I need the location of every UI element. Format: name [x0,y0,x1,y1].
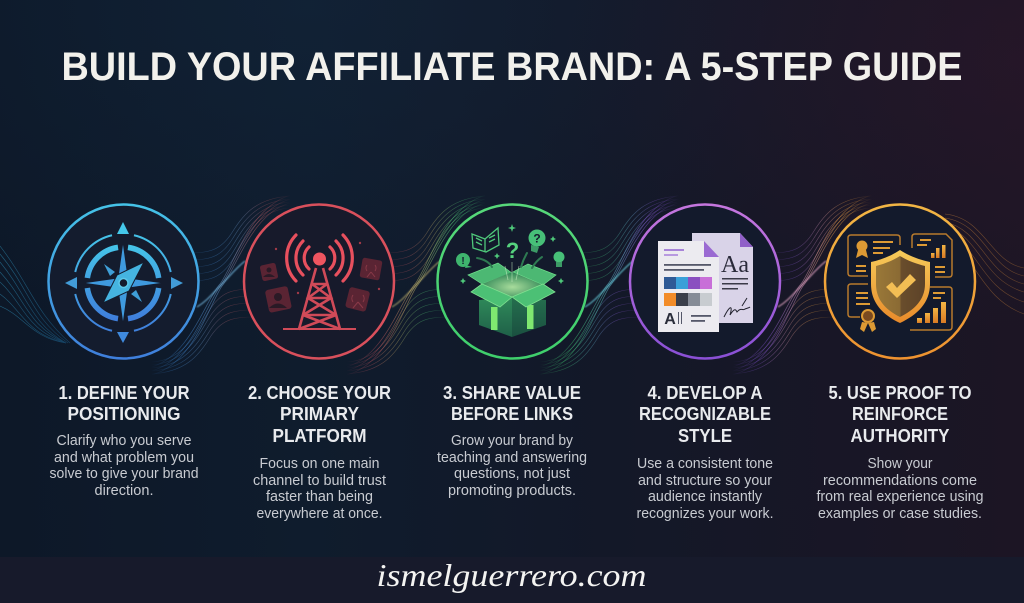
text: step 1 description: and what problem you [54,450,194,466]
title: BUILD YOUR AFFILIATE BRAND: A 5-STEP GUIDE [62,45,962,89]
footer website: ismelguerrero.com [376,557,646,593]
text: step 1 description [50,433,198,499]
text: step 2 description: everywhere at once. [256,506,382,522]
text: step 3 description [437,433,587,499]
text: step 2 description: channel to build trust [253,473,386,489]
heading: step 5: AUTHORITY [850,426,950,446]
text: step 1 description: Clarify who you serve [56,433,192,449]
icon: brand style documents: Aa [721,252,749,278]
heading: step 2: PLATFORM [272,426,366,446]
heading: step 3: 3. SHARE VALUE [443,383,581,403]
icon: brand style documents [630,204,780,358]
heading: step 4 [639,383,771,446]
icon: open gift box: ! [461,256,465,267]
text: step 4 description: recognizes your work. [636,506,774,522]
text: step 3 description: teaching and answering [437,450,587,466]
text: step 4 description: and structure so your [638,473,772,489]
heading: step 1: 1. DEFINE YOUR [58,383,190,403]
flowing wave ribbons connecting the steps [0,195,1024,375]
text: step 3 description: Grow your brand by [451,433,574,449]
icon: open gift box [438,204,588,358]
text: step 4 description: Use a consistent tone [637,456,773,472]
icon: open gift box: ? [506,238,519,263]
heading: step 1: POSITIONING [68,404,180,424]
heading: step 5: 5. USE PROOF TO [828,383,972,403]
icon: brand style documents: A [664,311,676,328]
heading: step 3 [443,383,581,424]
heading: step 4: STYLE [678,426,732,446]
text: step 1 description: solve to give your brand [50,466,198,482]
text: step 5 description [816,456,984,522]
heading: step 5: REINFORCE [852,404,948,424]
text: step 2 description [253,456,386,522]
icon: shield with proof cards [825,204,975,358]
text: step 2 description: faster than being [266,489,373,505]
icon: broadcast tower [244,204,394,358]
heading: step 4: 4. DEVELOP A [648,383,762,403]
text: step 2 description: Focus on one main [260,456,380,472]
text: step 4 description [636,456,774,522]
heading: step 2: 2. CHOOSE YOUR [248,383,391,403]
text: step 5 description: examples or case studies. [818,506,982,522]
icon: compass [48,204,198,358]
heading: step 2 [248,383,391,446]
heading: step 3: BEFORE LINKS [451,404,573,424]
panel: step 5 use proof to reinforce authority [816,204,984,522]
icon: open gift box: ? [533,232,541,246]
heading: step 5 [828,383,972,446]
panel: step 2 choose your primary platform [244,204,394,522]
text: step 4 description: audience instantly [648,489,763,505]
heading: step 1 [58,383,190,424]
panel: step 4 develop a recognizable style [630,204,780,522]
text: step 1 description: direction. [94,483,154,499]
panel: step 3 share value before links [437,204,588,499]
text: step 5 description: recommendations come [823,473,977,489]
panel: step 1 define your positioning [48,204,198,499]
heading: step 2: PRIMARY [280,404,359,424]
footer band [0,557,1024,603]
text: step 5 description: Show your [868,456,933,472]
text: step 5 description: from real experience using [816,489,984,505]
text: step 3 description: promoting products. [448,483,576,499]
text: step 3 description: questions, not just [454,466,570,482]
heading: step 4: RECOGNIZABLE [639,404,771,424]
